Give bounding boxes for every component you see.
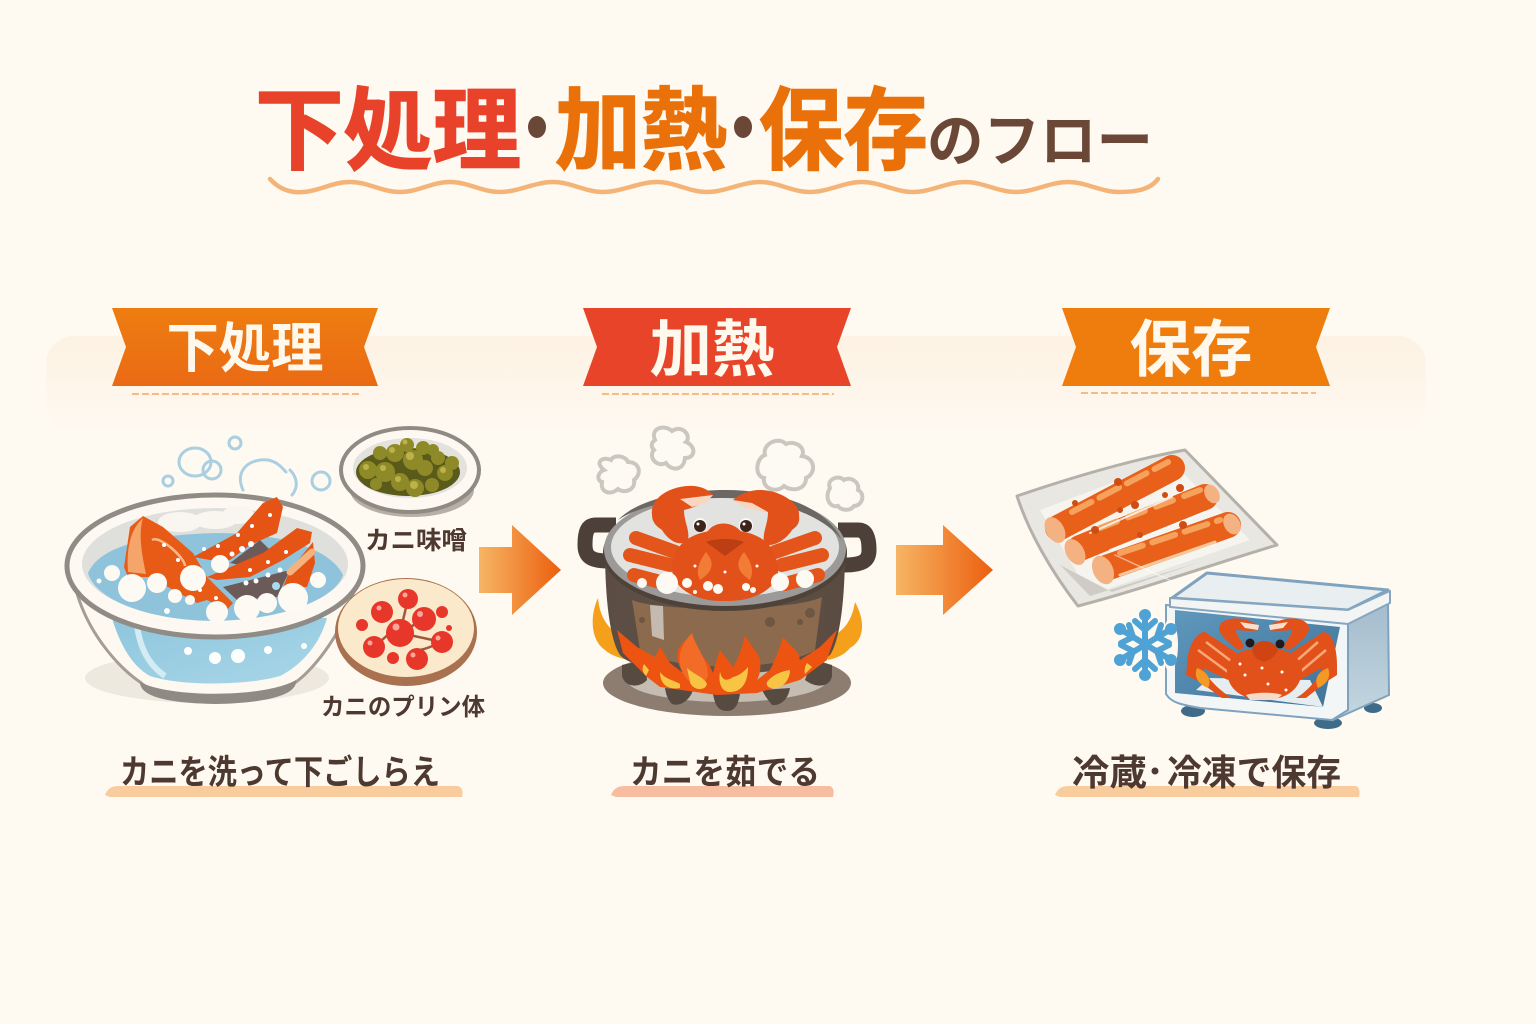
icon: plate of crab miso bbox=[341, 428, 479, 517]
background band bbox=[46, 336, 1426, 432]
arrow: step 1 to step 2 bbox=[479, 525, 561, 615]
title: 下処理 bbox=[255, 82, 521, 182]
caption: 保存: 冷蔵 bbox=[1072, 752, 1147, 793]
icon: vacuum bag with crab legs bbox=[1017, 450, 1277, 606]
ribbon: 下処理 bbox=[112, 308, 378, 394]
ribbon: 保存 bbox=[1062, 308, 1330, 393]
caption: 保存 bbox=[1055, 752, 1360, 797]
icon: plate of purines bbox=[335, 578, 477, 686]
icon: pot with crab bbox=[603, 486, 847, 674]
icon: pot handles bbox=[585, 525, 869, 565]
label: カニ味噌: カニ味噌 bbox=[365, 527, 467, 555]
icon: back flames bbox=[593, 598, 862, 660]
icon: burner grate bbox=[622, 660, 832, 711]
icon: snowflake bbox=[1117, 612, 1178, 678]
icon: steam bubbles over bowl bbox=[163, 437, 330, 495]
caption: 加熱: カニを茹でる bbox=[630, 754, 820, 792]
title wavy underline bbox=[270, 179, 1158, 192]
title: 加熱 bbox=[555, 82, 727, 182]
title: 保存 bbox=[759, 82, 928, 182]
icon: bowl of water with crab legs bbox=[67, 495, 363, 704]
icon: burner ring bbox=[603, 650, 851, 716]
arrow: step 2 to step 3 bbox=[896, 525, 993, 615]
caption: 保存: 冷凍で保存 bbox=[1167, 752, 1341, 793]
icon: freezer with crab bbox=[1166, 573, 1390, 729]
ribbon: 加熱: 加熱 bbox=[650, 316, 774, 385]
title bbox=[255, 82, 1153, 182]
title: のフロー bbox=[927, 109, 1153, 174]
ribbon: 加熱 bbox=[583, 308, 851, 394]
ribbon: 保存: 保存 bbox=[1130, 316, 1252, 385]
icon: steam clouds bbox=[598, 428, 862, 510]
label: カニのプリン体: カニのプリン体 bbox=[321, 694, 485, 721]
icon: front flames bbox=[617, 630, 837, 695]
caption: 下処理: カニを洗って下ごしらえ bbox=[120, 754, 440, 792]
ribbon: 下処理: 下処理 bbox=[166, 319, 324, 379]
